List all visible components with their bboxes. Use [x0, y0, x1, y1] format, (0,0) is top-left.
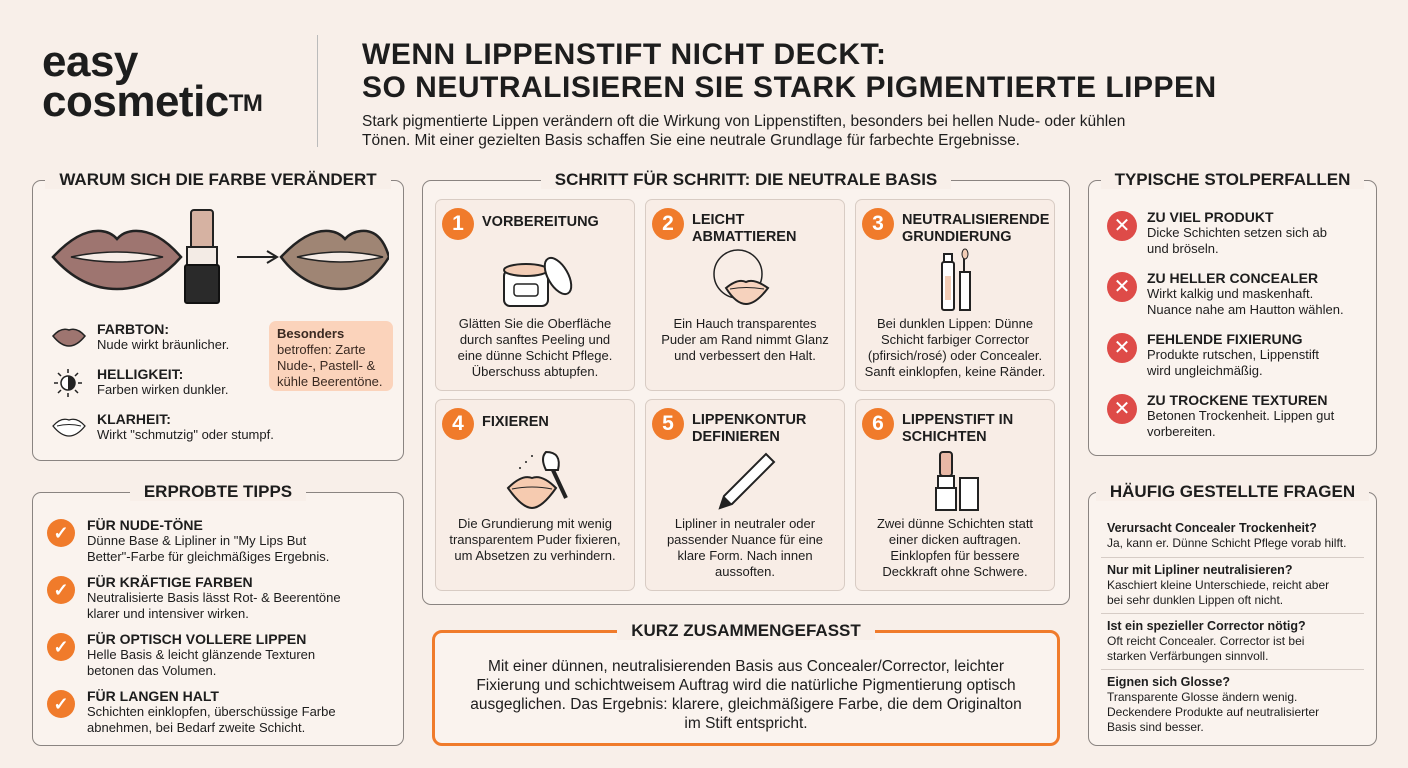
- pitfall 3: [1107, 331, 1319, 378]
- tip 2: [47, 574, 341, 621]
- tip 4: Schichten einklopfen, überschüssige Farbe: [87, 704, 336, 719]
- faq 2: bei sehr dunklen Lippen oft nicht.: [1107, 593, 1283, 607]
- faq 3: [1107, 619, 1306, 663]
- faq 2: Nur mit Lipliner neutralisieren?: [1107, 563, 1292, 577]
- step 1: VORBEREITUNG: [482, 214, 599, 230]
- step 1: Glätten Sie die Oberfläche durch sanftes Peeling und eine dünne Schicht Pflege. Überschuss abtupfen.: [458, 316, 612, 379]
- pitfall 1: Dicke Schichten setzen sich ab: [1147, 225, 1327, 240]
- callout: besonders betroffen: Besonders betroffen: Zarte Nude-, Pastell- & kühle Beerentöne.: [277, 326, 383, 389]
- step 2: LEICHT: [692, 212, 744, 228]
- faq 1: [1107, 521, 1346, 550]
- tip 1: ✓: [53, 523, 69, 543]
- item: helligkeit: Farben wirken dunkler.: [97, 382, 229, 397]
- item: klarheit: KLARHEIT:: [97, 411, 171, 427]
- step 1: [435, 199, 635, 391]
- step 6: LIPPENSTIFT IN: [902, 412, 1013, 428]
- pitfall 1: ZU VIEL PRODUKT: [1147, 209, 1274, 225]
- item: farbton: Nude wirkt bräunlicher.: [97, 337, 229, 352]
- tip 2: FÜR KRÄFTIGE FARBEN: [87, 574, 253, 590]
- pitfall 3: wird ungleichmäßig.: [1147, 363, 1263, 378]
- pitfall 2: [1107, 270, 1344, 317]
- step 5: LIPPENKONTUR: [692, 412, 806, 428]
- step 2: 2: [662, 212, 674, 235]
- tip 3: [47, 631, 315, 678]
- item: helligkeit: [54, 366, 229, 397]
- subtitle: Stark pigmentierte Lippen verändern oft die Wirkung von Lippenstiften, besonders bei hellen Nude- oder kühlen Tönen. Mit einer gezielten Basis schaffen Sie eine neutrale Grundlage für farbechte Ergebnisse.: [362, 113, 1125, 149]
- step 5: DEFINIEREN: [692, 429, 780, 445]
- tip 4: ✓: [53, 694, 69, 714]
- faq 4: Eignen sich Glosse?: [1107, 675, 1230, 689]
- step 3: NEUTRALISIERENDE: [902, 212, 1049, 228]
- item: farbton: FARBTON:: [97, 321, 169, 337]
- step 3: [855, 199, 1055, 391]
- step 6: [855, 399, 1055, 591]
- tip 2: klarer und intensiver wirken.: [87, 606, 249, 621]
- faq 1: Ja, kann er. Dünne Schicht Pflege vorab hilft.: [1107, 536, 1346, 550]
- step 5: 5: [662, 412, 674, 435]
- panel: warum sich die farbe verändert: [32, 180, 404, 461]
- faq 3: Ist ein spezieller Corrector nötig?: [1107, 619, 1306, 633]
- pitfall 4: vorbereiten.: [1147, 424, 1216, 439]
- logo: easy: [42, 37, 138, 86]
- faq 4: [1107, 675, 1319, 734]
- tip 3: betonen das Volumen.: [87, 663, 216, 678]
- step 3: Bei dunklen Lippen: Dünne Schicht farbiger Corrector (pfirsich/rosé) oder Concealer. Sanft einklopfen, keine Ränder.: [865, 316, 1045, 379]
- tip 3: Helle Basis & leicht glänzende Texturen: [87, 647, 315, 662]
- step 3: 3: [872, 212, 884, 235]
- pitfall 4: [1107, 392, 1334, 439]
- faq 4: Deckendere Produkte auf neutralisierter: [1107, 705, 1319, 719]
- item: farbton: [52, 321, 229, 352]
- callout: kurz zusammengefasst: KURZ ZUSAMMENGEFASST: [631, 621, 861, 640]
- callout: kurz zusammengefasst: Mit einer dünnen, neutralisierenden Basis aus Concealer/Corrector, leichter Fixierung und schichtweisem Auftrag wird die natürliche Pigmentierung optisch ausgeglichen. Das Ergebnis: klarere, gleichmäßigere Farbe, die dem Originalton im Stift entspricht.: [470, 658, 1022, 732]
- pitfall 4: ZU TROCKENE TEXTUREN: [1147, 392, 1327, 408]
- pitfall 2: Wirkt kalkig und maskenhaft.: [1147, 286, 1313, 301]
- step 1: 1: [452, 212, 464, 235]
- pitfall 1: ✕: [1114, 215, 1130, 237]
- step 3: GRUNDIERUNG: [902, 229, 1012, 245]
- panel: schritt für schritt: [422, 180, 1070, 605]
- title: SO NEUTRALISIEREN SIE STARK PIGMENTIERTE LIPPEN: [362, 71, 1217, 104]
- step 4: Die Grundierung mit wenig transparentem Puder fixieren, um Absetzen zu verhindern.: [449, 516, 621, 563]
- faq 2: Kaschiert kleine Unterschiede, reicht aber: [1107, 578, 1329, 592]
- faq 3: starken Verfärbungen sinnvoll.: [1107, 649, 1268, 663]
- text: ERPROBTE TIPPS: [144, 482, 292, 501]
- step 6: Zwei dünne Schichten statt einer dicken auftragen. Einklopfen für bessere Deckkraft ohne Schwere.: [877, 516, 1033, 579]
- panel: häufig gestellte fragen: [1088, 492, 1377, 746]
- tip 3: ✓: [53, 637, 69, 657]
- panel: typische stolperfallen: [1088, 180, 1377, 456]
- pitfall 4: Betonen Trockenheit. Lippen gut: [1147, 408, 1334, 423]
- faq 4: Transparente Glosse ändern wenig.: [1107, 690, 1297, 704]
- pitfall 3: FEHLENDE FIXIERUNG: [1147, 331, 1303, 347]
- item: helligkeit: HELLIGKEIT:: [97, 366, 183, 382]
- step 5: [645, 399, 845, 591]
- pitfall 2: ZU HELLER CONCEALER: [1147, 270, 1318, 286]
- text: WARUM SICH DIE FARBE VERÄNDERT: [59, 170, 377, 189]
- item: klarheit: Wirkt "schmutzig" oder stumpf.: [97, 427, 274, 442]
- title: [362, 38, 1217, 104]
- callout: kurz zusammengefasst: [432, 630, 1060, 746]
- step 5: Lipliner in neutraler oder passender Nuance für eine klare Form. Nach innen aussoften.: [667, 516, 823, 579]
- faq 1: Verursacht Concealer Trockenheit?: [1107, 521, 1317, 535]
- faq 4: Basis sind besser.: [1107, 720, 1204, 734]
- step 4: [435, 399, 635, 591]
- text: TYPISCHE STOLPERFALLEN: [1115, 170, 1350, 189]
- text: SCHRITT FÜR SCHRITT: DIE NEUTRALE BASIS: [555, 170, 937, 189]
- pitfall 3: ✕: [1114, 337, 1130, 359]
- tip 1: [47, 517, 329, 564]
- logo: [42, 37, 262, 126]
- tip 4: [47, 688, 336, 735]
- tip 3: FÜR OPTISCH VOLLERE LIPPEN: [87, 631, 306, 647]
- item: klarheit: [52, 411, 274, 442]
- step 6: SCHICHTEN: [902, 429, 987, 445]
- text: HÄUFIG GESTELLTE FRAGEN: [1110, 482, 1355, 501]
- tip 1: FÜR NUDE-TÖNE: [87, 517, 203, 533]
- panel: erprobte tipps: [32, 492, 404, 746]
- pitfall 4: ✕: [1114, 398, 1130, 420]
- step 2: Ein Hauch transparentes Puder am Rand nimmt Glanz und verbessert den Halt.: [661, 316, 829, 363]
- pitfall 3: Produkte rutschen, Lippenstift: [1147, 347, 1319, 362]
- tip 1: Dünne Base & Lipliner in "My Lips But: [87, 533, 306, 548]
- step 4: FIXIEREN: [482, 414, 549, 430]
- tip 4: FÜR LANGEN HALT: [87, 688, 219, 704]
- pitfall 1: und bröseln.: [1147, 241, 1219, 256]
- step 4: 4: [452, 412, 464, 435]
- title: WENN LIPPENSTIFT NICHT DECKT:: [362, 38, 886, 71]
- step 2: [645, 199, 845, 391]
- tip 4: abnehmen, bei Bedarf zweite Schicht.: [87, 720, 305, 735]
- step 2: ABMATTIEREN: [692, 229, 796, 245]
- pitfall 1: [1107, 209, 1327, 256]
- illustration: lips before/after: [51, 209, 389, 304]
- faq 3: Oft reicht Concealer. Corrector ist bei: [1107, 634, 1304, 648]
- pitfall 2: Nuance nahe am Hautton wählen.: [1147, 302, 1344, 317]
- logo: cosmeticTM: [42, 77, 262, 126]
- pitfall 2: ✕: [1114, 276, 1130, 298]
- tip 1: Better"-Farbe für gleichmäßiges Ergebnis.: [87, 549, 329, 564]
- tip 2: ✓: [53, 580, 69, 600]
- faq 2: [1107, 563, 1329, 607]
- step 6: 6: [872, 412, 884, 435]
- tip 2: Neutralisierte Basis lässt Rot- & Beerentöne: [87, 590, 341, 605]
